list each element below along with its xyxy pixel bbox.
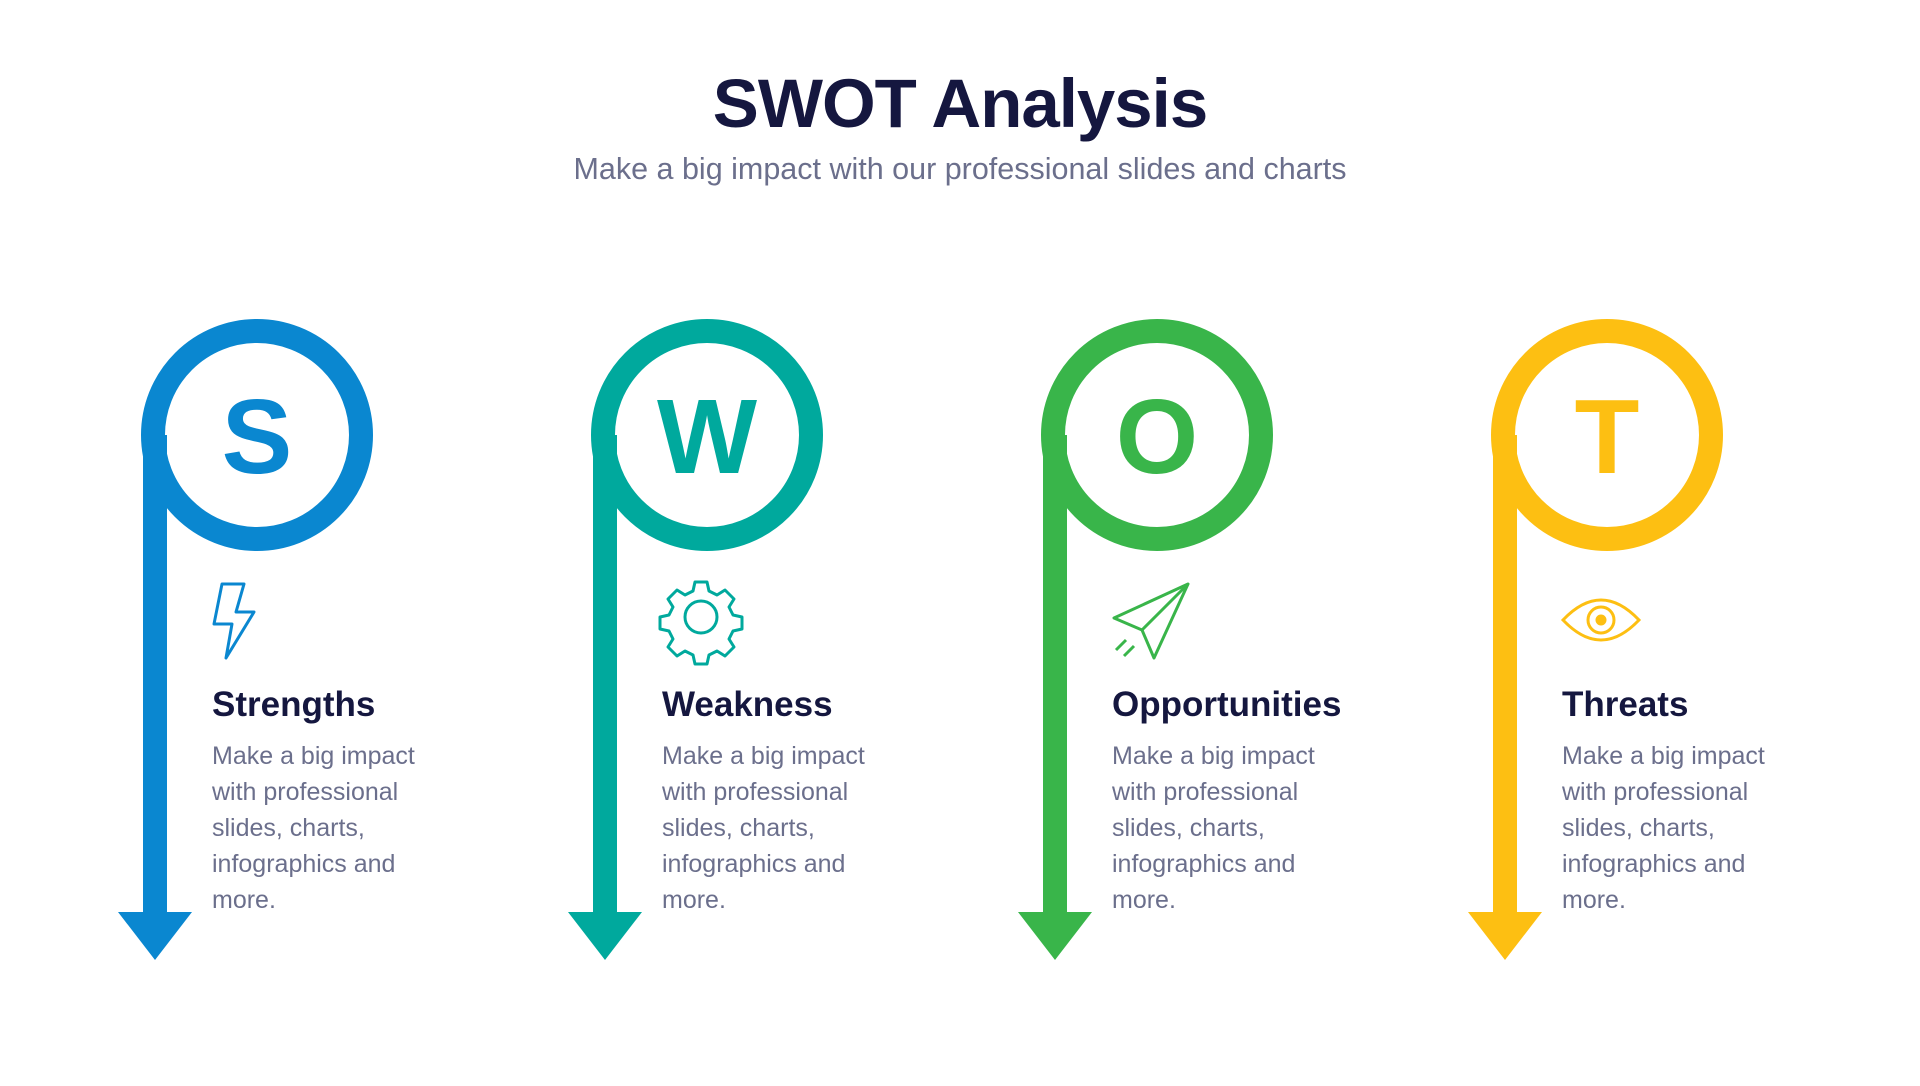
- heading: Opportunities: [1112, 685, 1341, 724]
- body text: slides, charts,: [662, 814, 815, 842]
- arrow: weakness: [568, 435, 642, 960]
- panel: weakness: [568, 331, 865, 960]
- body text: Make a big impact: [212, 742, 415, 770]
- icon: gear: [660, 582, 742, 664]
- body text: slides, charts,: [212, 814, 365, 842]
- heading: Strengths: [212, 685, 375, 724]
- body text: more.: [212, 886, 276, 914]
- panel: opportunities: [1018, 331, 1341, 960]
- body text: Make a big impact: [1562, 742, 1765, 770]
- body text: Make a big impact: [1112, 742, 1315, 770]
- body text: infographics and: [212, 850, 395, 878]
- circle marker W: W: [657, 378, 757, 496]
- icon: eye: [1563, 600, 1639, 640]
- body text: with professional: [661, 778, 848, 806]
- title: SWOT Analysis: [713, 65, 1207, 142]
- arrow: opportunities: [1018, 435, 1092, 960]
- heading: Weakness: [662, 685, 833, 724]
- body text: infographics and: [662, 850, 845, 878]
- body text: slides, charts,: [1112, 814, 1265, 842]
- panel: strengths: [118, 331, 415, 960]
- body text: with professional: [211, 778, 398, 806]
- circle marker O: [1053, 331, 1261, 539]
- body text: more.: [662, 886, 726, 914]
- arrow: strengths: [118, 435, 192, 960]
- circle marker S: [153, 331, 361, 539]
- panel: threats: [1468, 331, 1765, 960]
- body text: more.: [1112, 886, 1176, 914]
- body text: with professional: [1111, 778, 1298, 806]
- circle marker S: S: [222, 378, 292, 496]
- body text: Make a big impact: [662, 742, 865, 770]
- body text: slides, charts,: [1562, 814, 1715, 842]
- body text: with professional: [1561, 778, 1748, 806]
- circle marker W: [603, 331, 811, 539]
- arrow: threats: [1468, 435, 1542, 960]
- body text: more.: [1562, 886, 1626, 914]
- body text: infographics and: [1112, 850, 1295, 878]
- icon: paper plane: [1114, 584, 1188, 658]
- heading: Threats: [1562, 685, 1688, 724]
- body text: infographics and: [1562, 850, 1745, 878]
- circle marker T: T: [1575, 378, 1639, 496]
- icon: lightning: [214, 584, 254, 658]
- subtitle: Make a big impact with our professional slides and charts: [573, 152, 1347, 186]
- circle marker T: [1503, 331, 1711, 539]
- circle marker O: O: [1116, 378, 1198, 496]
